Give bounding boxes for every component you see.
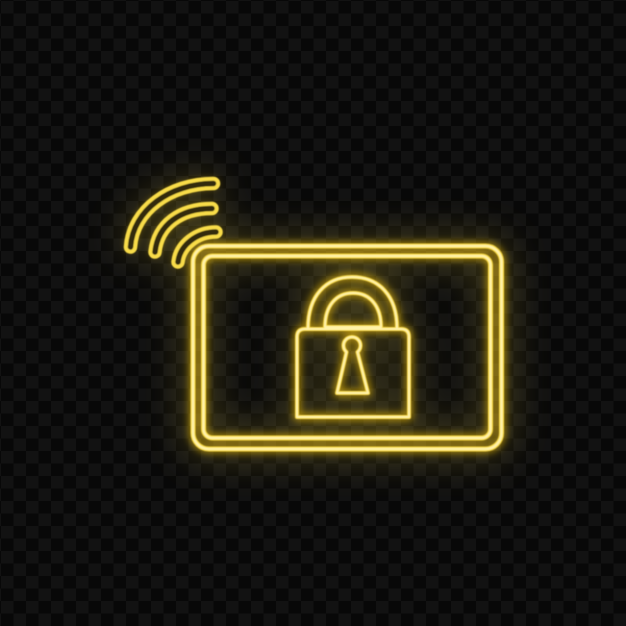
neon icon: card with wifi signal and padlock [130, 184, 502, 449]
close glow [130, 184, 502, 449]
wide ambient glow [130, 184, 502, 449]
icon: wifi signal arcs [130, 184, 216, 262]
icon: padlock with keyhole [297, 277, 409, 417]
card: double rounded frame [193, 246, 502, 449]
